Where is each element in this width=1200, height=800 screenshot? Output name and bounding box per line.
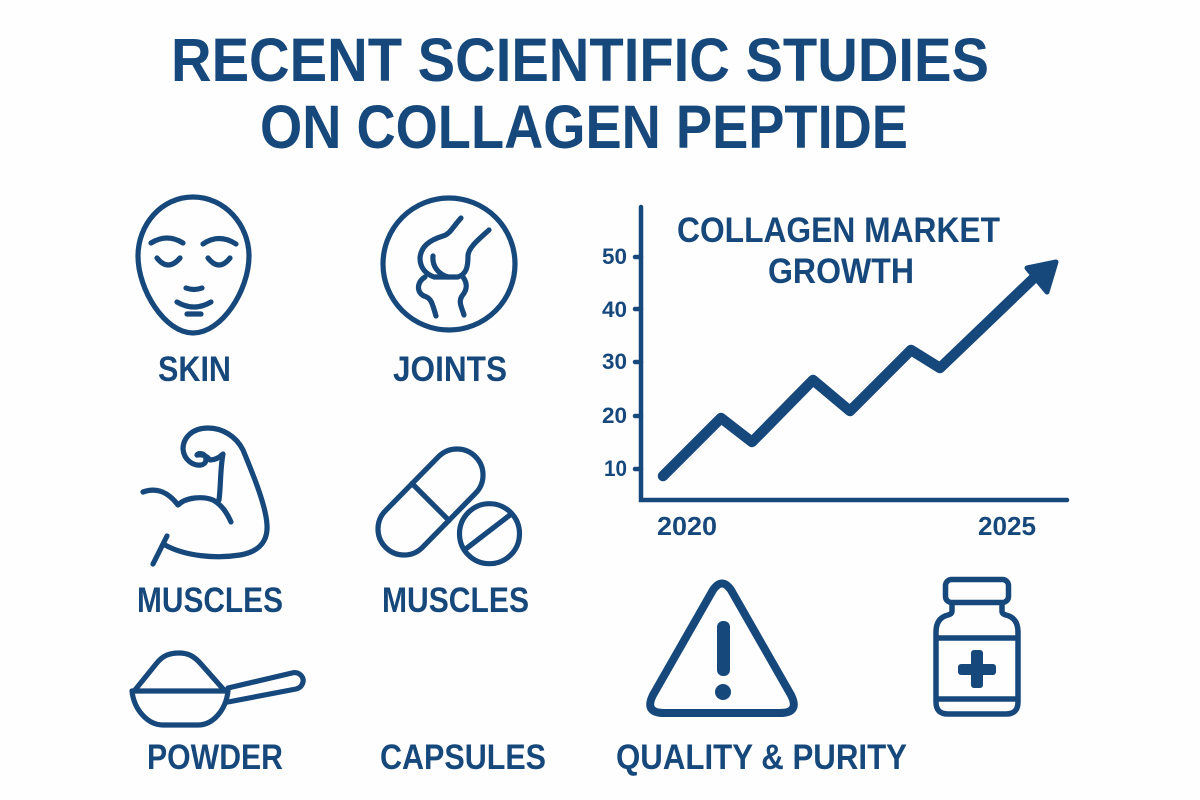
icon: powder scoop bbox=[132, 653, 303, 725]
icon: face bbox=[138, 197, 249, 333]
y axis labels: 20 bbox=[602, 403, 627, 428]
panel: market growth chart bbox=[602, 207, 1067, 541]
panel: skin bbox=[138, 197, 249, 389]
growth arrow bbox=[663, 262, 1056, 476]
panel: powder bbox=[132, 653, 303, 777]
panel: muscles bbox=[137, 428, 283, 620]
chart axes bbox=[635, 207, 1067, 500]
label: skin: SKIN bbox=[158, 350, 231, 389]
chart title bbox=[677, 211, 1000, 291]
icon: flexed arm bbox=[143, 428, 267, 564]
chart title: GROWTH bbox=[768, 252, 914, 291]
label: muscles second: MUSCLES bbox=[382, 581, 529, 620]
icon: supplement bottle bbox=[936, 580, 1018, 714]
x axis labels: 2025 bbox=[978, 511, 1036, 541]
x axis labels bbox=[657, 511, 1036, 541]
title bbox=[171, 26, 989, 161]
label: capsules: CAPSULES bbox=[380, 738, 546, 777]
panel: quality and purity bbox=[616, 580, 1018, 777]
icon: knee joint bbox=[383, 198, 515, 330]
chart title: COLLAGEN MARKET bbox=[677, 211, 1000, 250]
y axis labels: 30 bbox=[602, 349, 627, 374]
y axis labels bbox=[602, 244, 627, 481]
label: muscles: MUSCLES bbox=[137, 581, 283, 620]
label: joints: JOINTS bbox=[393, 350, 507, 389]
icon: capsule and tablet bbox=[378, 449, 520, 564]
title: ON COLLAGEN PEPTIDE bbox=[260, 93, 908, 161]
x axis labels: 2020 bbox=[657, 511, 717, 541]
y axis labels: 50 bbox=[602, 244, 627, 269]
panel: pills bbox=[378, 449, 529, 620]
label: quality and purity: QUALITY & PURITY bbox=[616, 738, 907, 777]
panel: joints bbox=[383, 198, 515, 389]
y axis labels: 10 bbox=[604, 456, 627, 481]
icon: warning triangle bbox=[650, 584, 794, 713]
title: RECENT SCIENTIFIC STUDIES bbox=[171, 26, 989, 94]
y axis labels: 40 bbox=[602, 297, 627, 322]
label: powder: POWDER bbox=[147, 738, 283, 777]
